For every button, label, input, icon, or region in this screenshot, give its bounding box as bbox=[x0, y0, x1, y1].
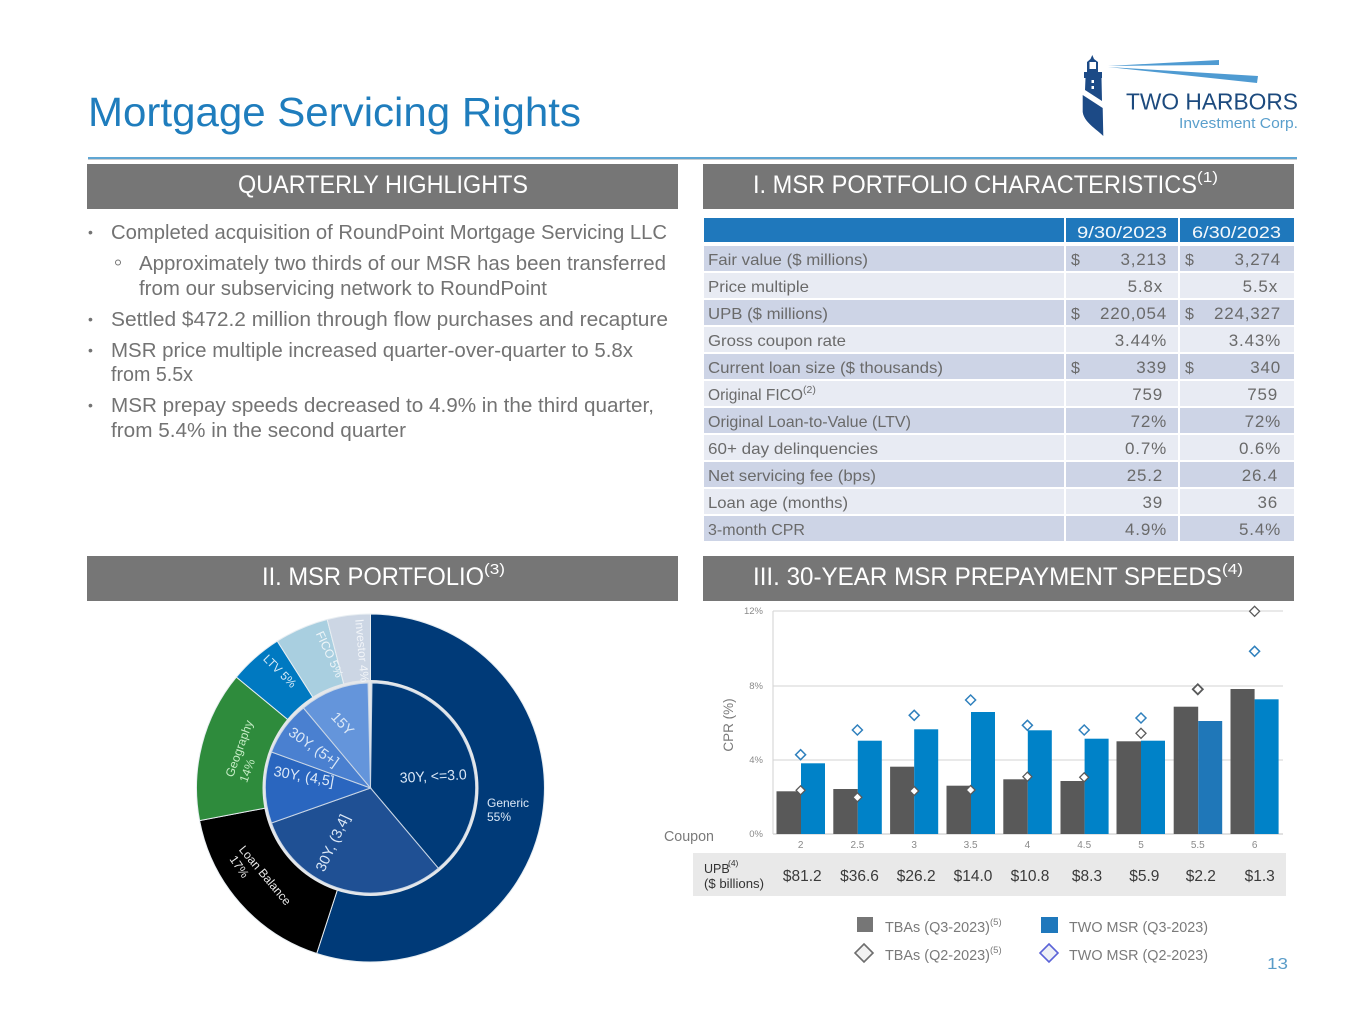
table: characteristics: $ bbox=[1071, 252, 1080, 269]
table: characteristics: 5.8x bbox=[1128, 277, 1163, 296]
text block: highlights bullets: Approximately two thirds of our MSR has been transferred bbox=[139, 253, 666, 275]
heading: MSR portfolio characteristics: (1) bbox=[1197, 169, 1218, 186]
table: characteristics: Net servicing fee (bps) bbox=[708, 468, 876, 485]
label: Loan Balance: Loan Balance bbox=[236, 843, 294, 908]
table: characteristics: $ bbox=[1071, 306, 1080, 323]
table: characteristics: 224,327 bbox=[1214, 304, 1281, 323]
text block: highlights bullets: • bbox=[88, 342, 93, 358]
bar chart: CPR by coupon bbox=[664, 606, 1283, 851]
bar chart: CPR by coupon: 8% bbox=[749, 681, 764, 692]
table: characteristics: $ bbox=[1071, 360, 1080, 377]
label: Generic: Generic bbox=[487, 796, 529, 810]
table: characteristics: 3,274 bbox=[1234, 250, 1281, 269]
table: characteristics: 0.6% bbox=[1239, 439, 1281, 458]
donut chart: portfolio composition bbox=[197, 614, 544, 962]
table: characteristics: 0.7% bbox=[1125, 439, 1167, 458]
label: LTV: LTV 5% bbox=[260, 652, 300, 691]
label: 30Y up to 3.0: 30Y, <=3.0 bbox=[399, 767, 467, 787]
legend: TWO MSR (Q2-2023) bbox=[1069, 948, 1208, 964]
bar chart: CPR by coupon: CPR (%) bbox=[721, 698, 736, 752]
label: 30Y 5 plus: 30Y, (5+] bbox=[285, 725, 341, 771]
logo: Two Harbors: TWO HARBORS bbox=[1126, 88, 1298, 114]
table: characteristics: 339 bbox=[1136, 358, 1167, 377]
heading: quarterly highlights bbox=[87, 164, 678, 209]
table: characteristics: Price multiple bbox=[708, 279, 809, 296]
table: UPB by coupon: (4) bbox=[728, 858, 739, 868]
table: characteristics: 60+ day delinquencies bbox=[708, 441, 878, 458]
bar chart: CPR by coupon: 0% bbox=[749, 829, 764, 840]
table: characteristics: 9/30/2023 bbox=[1077, 223, 1167, 242]
table: UPB by coupon: $36.6 bbox=[840, 868, 879, 885]
table: characteristics: 3.43% bbox=[1229, 331, 1281, 350]
label: Generic share: 55% bbox=[487, 810, 511, 824]
bar chart: CPR by coupon: 3.5 bbox=[964, 840, 978, 851]
label: Geography: Geography bbox=[223, 718, 256, 779]
heading: prepayment speeds bbox=[703, 556, 1294, 601]
heading: MSR portfolio: (3) bbox=[484, 561, 505, 578]
table: UPB by coupon: $2.2 bbox=[1186, 868, 1216, 885]
table: characteristics: Current loan size ($ thousands) bbox=[708, 360, 943, 377]
bar chart: CPR by coupon: Coupon bbox=[664, 829, 714, 845]
heading: prepayment speeds: (4) bbox=[1222, 561, 1243, 578]
bar chart: CPR by coupon: 5 bbox=[1138, 840, 1144, 851]
legend: TBAs (Q2-2023) bbox=[885, 948, 990, 964]
table: characteristics: Gross coupon rate bbox=[708, 333, 846, 350]
title: Mortgage Servicing Rights bbox=[88, 89, 581, 135]
table: UPB by coupon: $81.2 bbox=[783, 868, 822, 885]
table: UPB by coupon: $5.9 bbox=[1129, 868, 1159, 885]
table: characteristics: 340 bbox=[1250, 358, 1281, 377]
table: UPB by coupon: $14.0 bbox=[954, 868, 993, 885]
text block: highlights bullets: Completed acquisition of RoundPoint Mortgage Servicing LLC bbox=[111, 222, 667, 244]
table: characteristics: 5.5x bbox=[1243, 277, 1278, 296]
panel: quarterly highlights bbox=[87, 164, 678, 442]
table: UPB by coupon: $10.8 bbox=[1011, 868, 1049, 885]
heading: MSR portfolio characteristics: I. MSR PORTFOLIO CHARACTERISTICS bbox=[753, 171, 1197, 199]
legend bbox=[855, 917, 1208, 964]
table: characteristics: 36 bbox=[1257, 493, 1278, 512]
text block: highlights bullets: from 5.4% in the second quarter bbox=[111, 420, 406, 442]
panel: MSR portfolio characteristics bbox=[703, 164, 1294, 541]
label: Loan Balance share: 17% bbox=[227, 853, 252, 881]
legend: TWO MSR (Q3-2023) bbox=[1069, 920, 1208, 936]
label: Investor: Investor 4% bbox=[352, 618, 372, 683]
table: characteristics: UPB ($ millions) bbox=[708, 306, 828, 323]
table: characteristics: 5.4% bbox=[1239, 520, 1281, 539]
text block: highlights bullets: MSR prepay speeds decreased to 4.9% in the third quarter, bbox=[111, 395, 654, 417]
table: characteristics: 759 bbox=[1132, 385, 1163, 404]
legend: (5) bbox=[990, 917, 1002, 928]
logo: Two Harbors bbox=[1083, 55, 1298, 136]
legend: (5) bbox=[990, 945, 1002, 956]
table: UPB by coupon: UPB bbox=[704, 862, 730, 876]
table: characteristics: $ bbox=[1185, 306, 1194, 323]
label: Geography share: 14% bbox=[237, 757, 258, 784]
text block: highlights bullets: • bbox=[88, 397, 93, 413]
table: characteristics: 4.9% bbox=[1125, 520, 1167, 539]
heading: prepayment speeds: III. 30-YEAR MSR PREPAYMENT SPEEDS bbox=[753, 563, 1222, 591]
bar chart: CPR by coupon: 2.5 bbox=[850, 840, 865, 851]
table: characteristics: 26.4 bbox=[1242, 466, 1278, 485]
table: characteristics bbox=[704, 218, 1294, 541]
table: characteristics: Original FICO bbox=[708, 387, 803, 404]
table: characteristics: 6/30/2023 bbox=[1192, 223, 1281, 242]
table: characteristics: 39 bbox=[1142, 493, 1163, 512]
text block: highlights bullets: from our subservicing network to RoundPoint bbox=[139, 278, 547, 300]
label: 30Y 3 to 4: 30Y, (3,4] bbox=[313, 812, 354, 874]
text block: highlights bullets: from 5.5x bbox=[111, 364, 193, 386]
table: UPB by coupon: $1.3 bbox=[1245, 868, 1275, 885]
text block: highlights bullets: MSR price multiple increased quarter-over-quarter to 5.8x bbox=[111, 340, 633, 362]
table: characteristics: 759 bbox=[1247, 385, 1278, 404]
heading: MSR portfolio: II. MSR PORTFOLIO bbox=[262, 563, 484, 591]
table: characteristics: $ bbox=[1185, 360, 1194, 377]
table: characteristics: $ bbox=[1185, 252, 1194, 269]
table: UPB by coupon bbox=[693, 853, 1286, 896]
bar chart: CPR by coupon: 4.5 bbox=[1077, 840, 1092, 851]
bar chart: CPR by coupon: 3 bbox=[911, 840, 917, 851]
text block: highlights bullets: • bbox=[88, 224, 93, 240]
bar chart: CPR by coupon: 4 bbox=[1025, 840, 1031, 851]
table: characteristics: Fair value ($ millions) bbox=[708, 252, 868, 269]
bar chart: CPR by coupon: 5.5 bbox=[1191, 840, 1205, 851]
table: characteristics: Original Loan-to-Value (LTV) bbox=[708, 414, 911, 431]
text block: highlights bullets: • bbox=[88, 311, 93, 327]
table: UPB by coupon: $26.2 bbox=[897, 868, 936, 885]
text block: highlights bullets bbox=[88, 222, 668, 442]
label: FICO: FICO 5% bbox=[313, 629, 347, 680]
bar chart: CPR by coupon: 12% bbox=[744, 606, 764, 617]
logo: Two Harbors: Investment Corp. bbox=[1179, 115, 1298, 132]
label: 30Y 4 to 5: 30Y, (4,5] bbox=[272, 764, 335, 790]
bar chart: CPR by coupon: 2 bbox=[798, 840, 804, 851]
table: UPB by coupon: ($ billions) bbox=[704, 877, 764, 891]
bar chart: CPR by coupon: 6 bbox=[1252, 840, 1258, 851]
table: characteristics: (2) bbox=[803, 384, 816, 396]
heading: quarterly highlights: QUARTERLY HIGHLIGHTS bbox=[238, 171, 528, 199]
heading: MSR portfolio bbox=[87, 556, 678, 601]
bar chart: CPR by coupon: 4% bbox=[749, 755, 764, 766]
table: characteristics: 3,213 bbox=[1120, 250, 1167, 269]
table: characteristics: 3-month CPR bbox=[708, 522, 805, 539]
table: characteristics: 3.44% bbox=[1115, 331, 1167, 350]
panel: prepayment speeds bbox=[664, 556, 1294, 964]
page number: 13 bbox=[1267, 956, 1288, 973]
table: characteristics: 25.2 bbox=[1127, 466, 1163, 485]
table: UPB by coupon: $8.3 bbox=[1072, 868, 1102, 885]
table: characteristics: 72% bbox=[1131, 412, 1167, 431]
table: characteristics: 220,054 bbox=[1100, 304, 1167, 323]
label: 15Y: 15Y bbox=[327, 709, 357, 739]
legend: TBAs (Q3-2023) bbox=[885, 920, 990, 936]
table: characteristics: 72% bbox=[1245, 412, 1281, 431]
text block: highlights bullets: Settled $472.2 million through flow purchases and recapture bbox=[111, 309, 668, 331]
panel: MSR portfolio bbox=[87, 556, 678, 962]
heading: MSR portfolio characteristics bbox=[703, 164, 1294, 209]
table: characteristics: Loan age (months) bbox=[708, 495, 848, 512]
